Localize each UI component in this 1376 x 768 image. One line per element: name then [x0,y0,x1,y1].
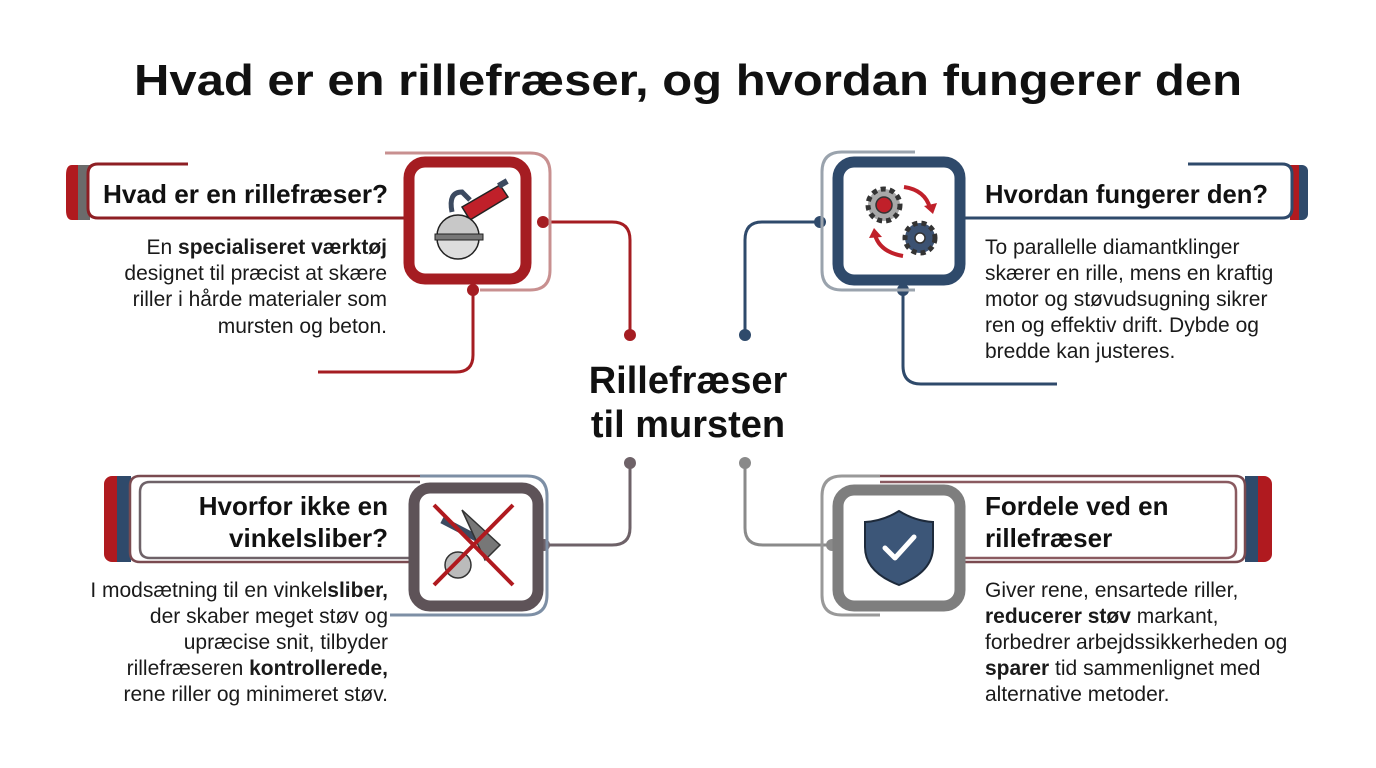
center label [589,360,787,446]
center label: til mursten [591,404,785,446]
icon: crossed-out angle grinder [390,476,547,615]
connector: top-right [739,216,1057,384]
panel: benefits [822,476,1287,706]
icon: shield check [822,476,960,615]
header bar [880,476,1272,562]
body text: ren og effektiv drift. Dybde og [985,314,1259,337]
title: Hvad er en rillefræser, og hvordan fungerer den [134,56,1242,105]
header bar: Hvordan fungerer den? [985,179,1268,209]
header bar: Hvorfor ikke en [199,491,388,521]
body text: rillefræseren kontrollerede, [127,657,388,680]
body text: reducerer støv markant, [985,605,1218,628]
connector: top-left [318,216,636,372]
body text: En specialiseret værktøj [147,236,387,259]
body text: bredde kan justeres. [985,340,1175,363]
body text: I modsætning til en vinkelsliber, [90,579,388,602]
body text: rene riller og minimeret støv. [123,683,388,706]
body text: forbedrer arbejdssikkerheden og [985,631,1287,654]
panel: what is it [66,153,550,338]
body text: mursten og beton. [218,315,387,338]
body text: riller i hårde materialer som [133,288,387,311]
center label: Rillefræser [589,360,787,402]
header bar: rillefræser [985,523,1112,553]
connector: bottom-right [739,457,838,551]
header bar: Fordele ved en [985,491,1168,521]
connector: bottom-left [538,457,636,551]
panel: how it works [822,152,1308,363]
body text: alternative metoder. [985,683,1169,706]
header bar [965,164,1308,220]
body text: sparer tid sammenlignet med [985,657,1260,680]
panel: why not angle grinder [90,476,547,706]
body text: skærer en rille, mens en kraftig [985,262,1273,285]
body text: motor og støvudsugning sikrer [985,288,1267,311]
body text: Giver rene, ensartede riller, [985,579,1238,602]
body text: designet til præcist at skære [124,262,387,285]
icon: groove cutter [385,153,550,290]
header bar [104,476,420,562]
body text: To parallelle diamantklinger [985,236,1239,259]
header bar: vinkelsliber? [229,523,388,553]
header bar: Hvad er en rillefræser? [103,179,388,209]
body text: upræcise snit, tilbyder [184,631,388,654]
icon: gears [822,152,960,290]
header bar [66,164,410,220]
body text: der skaber meget støv og [150,605,388,628]
